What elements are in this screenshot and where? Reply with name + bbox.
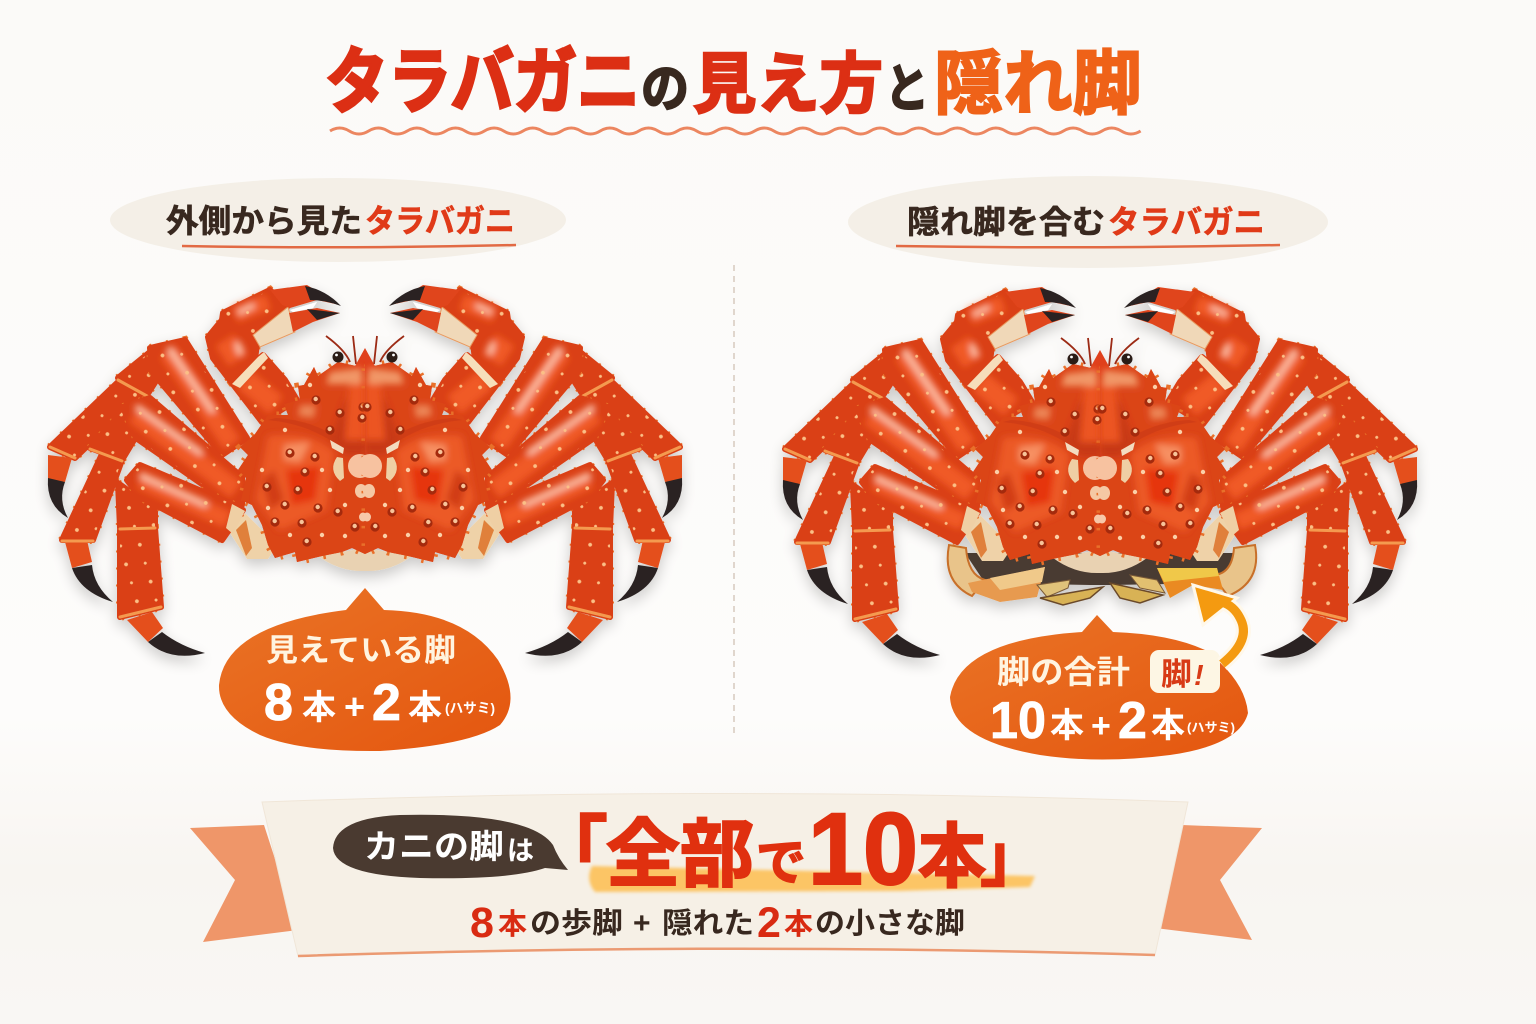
headline: で	[756, 835, 806, 891]
callout: visible legs: 本	[408, 689, 442, 727]
banner	[190, 792, 1262, 956]
summary line: 8	[470, 899, 494, 947]
badge: 脚	[1161, 657, 1192, 692]
callout: total legs: 本	[1050, 707, 1084, 745]
speech bubble	[333, 815, 568, 878]
yellow brush	[589, 866, 1035, 892]
summary line	[470, 899, 965, 947]
callout: visible legs: 8	[264, 674, 293, 732]
callout: total legs: 本	[1151, 707, 1185, 745]
heading: left panel: タラバガニ	[365, 203, 515, 239]
heading: left panel: 外側から見た	[166, 203, 362, 239]
summary line: 本	[498, 908, 527, 941]
crab: with hidden legs	[783, 287, 1417, 658]
summary line: の歩脚	[530, 907, 623, 940]
headline: 」	[980, 820, 1046, 894]
callout: total legs: +	[1091, 707, 1111, 745]
summary line: 本	[784, 908, 813, 941]
callout: visible legs	[219, 588, 511, 751]
headline: 本	[918, 818, 986, 896]
title: タラバガニ	[325, 43, 640, 123]
callout: total legs: 10	[990, 692, 1046, 750]
headline	[532, 792, 1046, 906]
title underline	[330, 128, 1141, 134]
title: の	[641, 61, 689, 119]
callout: total legs: 2	[1118, 692, 1147, 750]
summary line: 隠れた	[662, 907, 754, 940]
callout: total legs: (ハサミ)	[1187, 720, 1235, 735]
callout: total legs: 脚の合計	[997, 654, 1130, 690]
badge	[1150, 650, 1220, 693]
title: 隠れ脚	[934, 45, 1142, 123]
title: 見え方	[693, 47, 883, 121]
callout: visible legs: 見えている脚	[266, 633, 456, 668]
speech bubble: は	[507, 836, 534, 866]
summary line: +	[633, 907, 651, 940]
heading: right panel	[848, 176, 1328, 268]
title: と	[885, 61, 929, 119]
summary line: 2	[757, 899, 781, 947]
speech bubble: カニの脚	[364, 828, 504, 865]
callout: visible legs: +	[344, 686, 365, 727]
badge: !	[1194, 660, 1204, 692]
arrow	[1193, 585, 1243, 664]
callout: visible legs: 本	[302, 689, 336, 727]
ribbon left	[190, 825, 298, 942]
headline: 全部	[606, 813, 754, 896]
headline: 「	[532, 810, 608, 895]
headline: 10	[808, 792, 918, 906]
callout: visible legs: 2	[372, 674, 401, 732]
heading: left panel	[110, 178, 566, 262]
banner panel	[262, 794, 1188, 956]
title	[325, 43, 1142, 123]
crab: visible legs	[48, 285, 682, 656]
hidden legs	[948, 545, 1256, 605]
heading: right panel: タラバガニ	[1108, 204, 1265, 240]
callout: total legs	[950, 585, 1248, 760]
callout: visible legs: (ハサミ)	[445, 700, 495, 716]
heading: right panel: 隠れ脚を合む	[907, 204, 1105, 240]
ribbon right	[1155, 825, 1262, 940]
summary line: の小さな脚	[815, 907, 965, 940]
